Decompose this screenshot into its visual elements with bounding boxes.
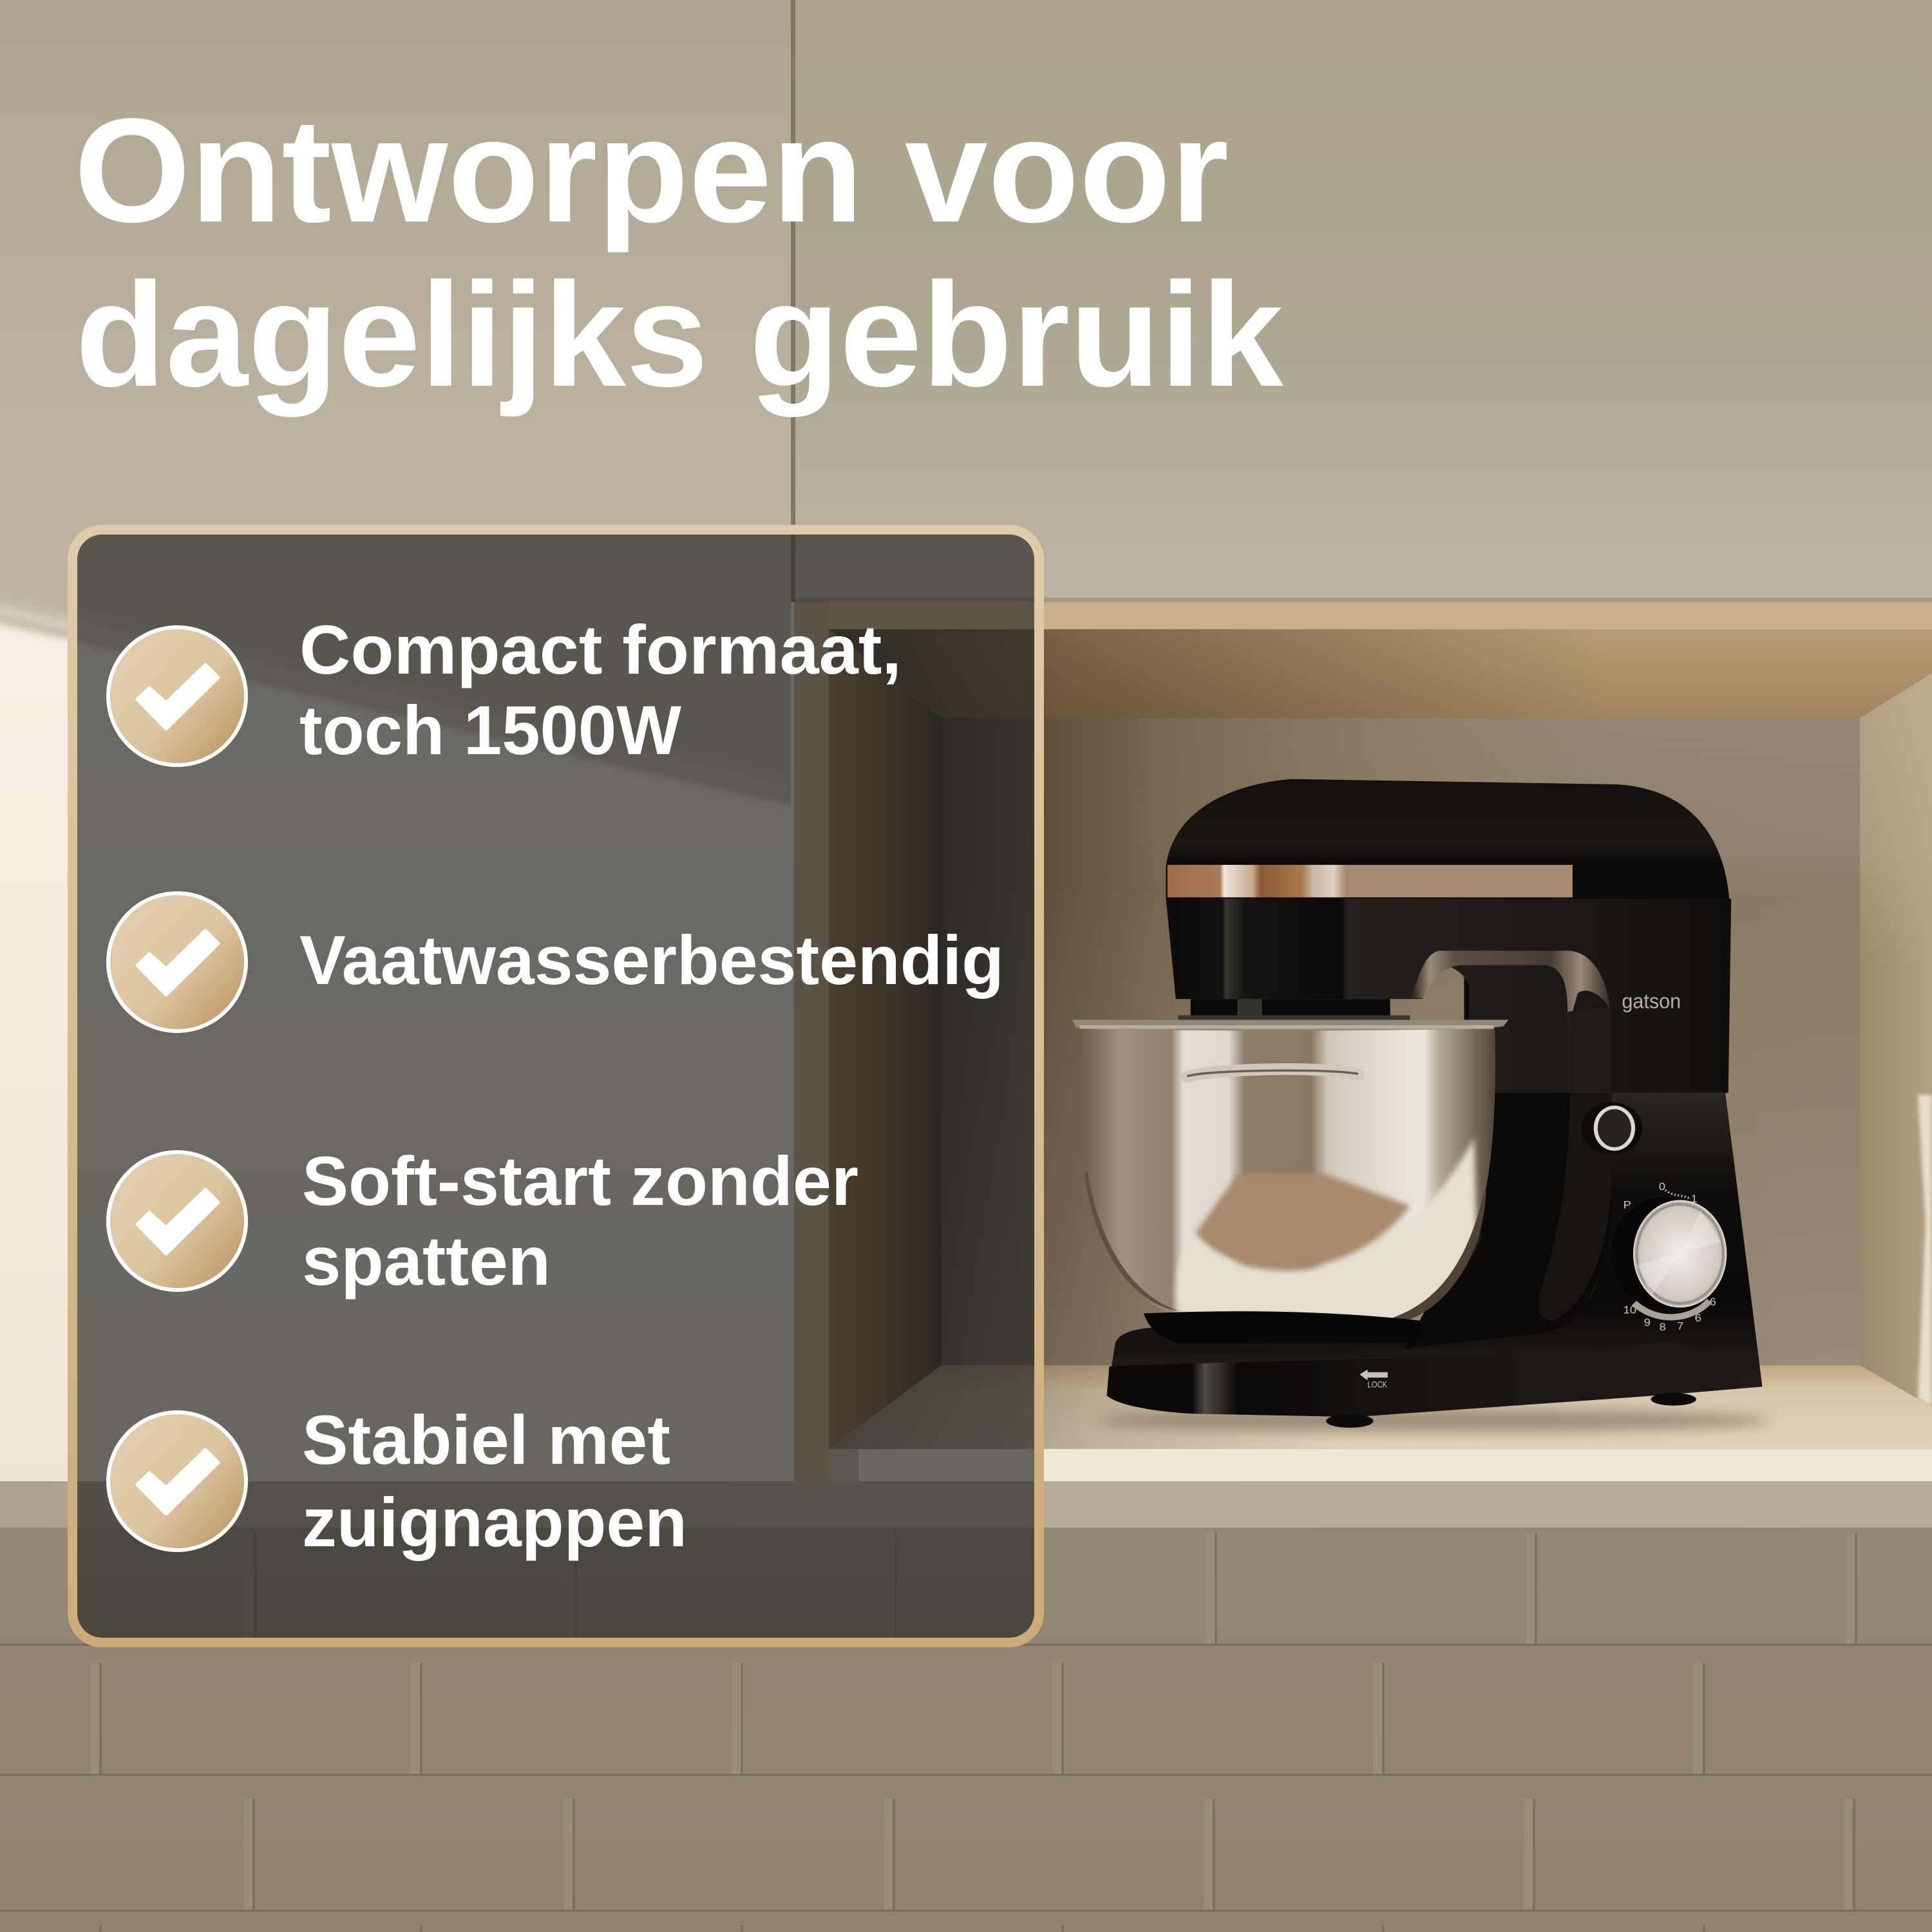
neck column and body fill bbox=[1405, 967, 1612, 1349]
speed dial bbox=[1611, 1180, 1727, 1333]
speed dial: 0 bbox=[1659, 1180, 1665, 1193]
sunlight patch on the right side bbox=[1918, 1095, 1932, 1407]
mixer feet bbox=[1326, 1393, 1696, 1428]
speed dial: 8 bbox=[1660, 1321, 1666, 1333]
shelf inner right side bbox=[1860, 673, 1932, 1407]
bowl reflections bbox=[1195, 1174, 1410, 1269]
icon: check badge bbox=[108, 627, 246, 765]
mixer base bbox=[1107, 1093, 1762, 1417]
bowl handle bbox=[1187, 1069, 1358, 1077]
text: stable with suction cups: zuignappen bbox=[302, 1483, 687, 1561]
feature: dishwasher bbox=[108, 893, 1004, 1031]
right cabinet door bbox=[795, 0, 1932, 598]
cream wall below the cabinet bbox=[0, 451, 796, 1488]
mixer head top bbox=[1166, 779, 1729, 899]
speed dial: 6 bbox=[1710, 1296, 1716, 1308]
brand name: gatson bbox=[1622, 990, 1681, 1013]
panel: feature list bbox=[72, 529, 1039, 1642]
title: dagelijks gebruik bbox=[75, 252, 1284, 417]
speed dial: 9 bbox=[1644, 1316, 1651, 1329]
shelf front top strip bbox=[829, 602, 1932, 629]
power button bbox=[1582, 1102, 1643, 1155]
shelf front bottom strip bbox=[829, 1449, 1932, 1481]
product: black stand mixer bbox=[1072, 779, 1770, 1432]
shelf front left post bbox=[794, 602, 829, 1481]
bowl bbox=[1072, 1016, 1508, 1326]
lock arrow label bbox=[1359, 1369, 1388, 1390]
feature: soft start bbox=[108, 1142, 858, 1300]
shelf back wall bbox=[942, 718, 1860, 1365]
mixer shadow on shelf bbox=[1099, 1409, 1770, 1432]
speed dial: 6 bbox=[1695, 1312, 1701, 1324]
shelf inner left side bbox=[829, 629, 942, 1449]
speed dial: 1 bbox=[1691, 1193, 1698, 1205]
speed dial: 7 bbox=[1677, 1320, 1683, 1332]
copper band bbox=[1168, 865, 1573, 897]
text: compact format: Compact formaat, bbox=[299, 611, 902, 688]
speed dial: 10 bbox=[1624, 1303, 1636, 1316]
text: soft start: spatten bbox=[302, 1222, 551, 1300]
text: dishwasher safe: Vaatwasserbestendig bbox=[299, 921, 1004, 999]
brick wall bbox=[0, 1528, 1932, 1932]
bowl lid rim bbox=[1072, 1020, 1508, 1030]
text: compact format: toch 1500W bbox=[299, 691, 681, 769]
text: soft start: Soft-start zonder bbox=[302, 1142, 858, 1220]
bowl foot bbox=[1144, 1311, 1425, 1344]
shelf underside board bbox=[829, 629, 1932, 718]
soft door shadow falling across the wall bbox=[0, 522, 791, 805]
speed dial: P bbox=[1624, 1198, 1631, 1211]
text: stable with suction cups: Stabiel met bbox=[302, 1401, 670, 1479]
counter ledge bbox=[0, 1481, 1932, 1528]
icon: check badge bbox=[108, 1412, 246, 1550]
panel frame and tinted fill bbox=[72, 529, 1039, 1642]
neck metallic arch bbox=[1410, 951, 1610, 1030]
left cabinet door bbox=[0, 0, 791, 522]
lock arrow label: LOCK bbox=[1367, 1380, 1387, 1390]
feature: suction cups bbox=[108, 1401, 687, 1561]
title: Ontworpen voor bbox=[74, 88, 1229, 253]
icon: check badge bbox=[108, 893, 246, 1031]
mixer head lower bbox=[1166, 899, 1731, 1093]
shelf surface bbox=[829, 1365, 1932, 1449]
icon: check badge bbox=[108, 1152, 246, 1290]
feature: compact bbox=[108, 611, 902, 769]
back wall upper light band bbox=[1298, 718, 1860, 863]
beater collar bbox=[1191, 999, 1390, 1017]
